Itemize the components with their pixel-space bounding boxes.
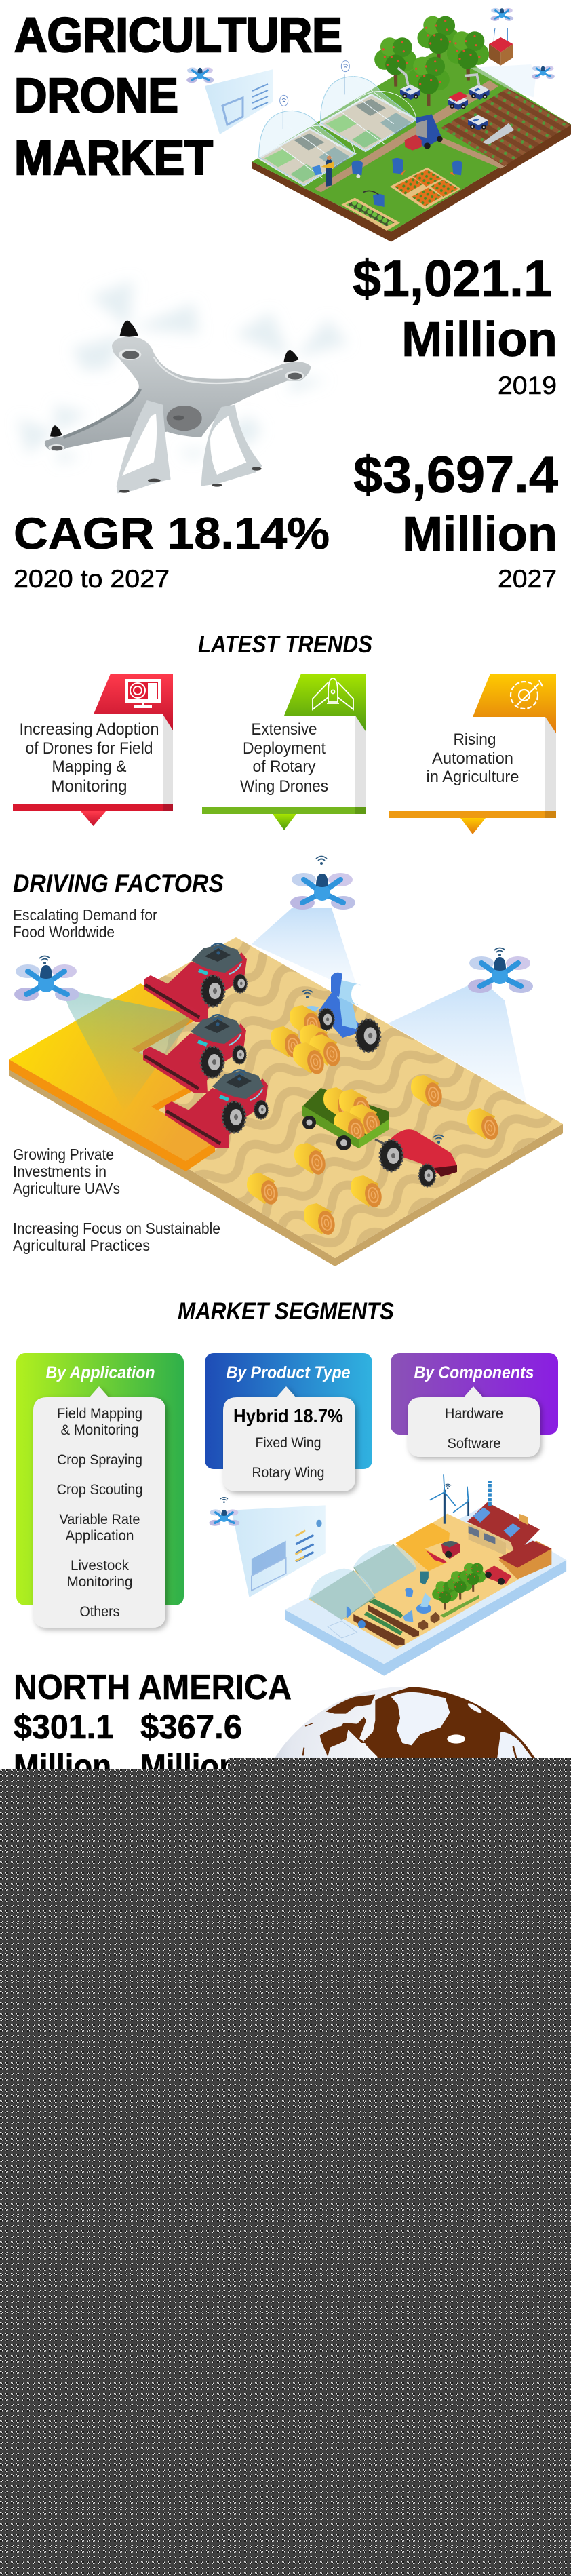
text: driver 1: Escalating Demand for bbox=[13, 906, 157, 924]
fruit trees bbox=[374, 16, 489, 106]
illustration: hologram panel with drone bbox=[209, 1498, 326, 1597]
stat: 2027 market size bbox=[353, 446, 558, 593]
panel: by product type: Rotary Wing bbox=[252, 1465, 324, 1481]
heading: driving factors: DRIVING FACTORS bbox=[13, 870, 224, 897]
panel: by application: Livestock bbox=[71, 1558, 129, 1574]
panel: by components: Hardware bbox=[445, 1406, 503, 1422]
stat: 2027 market size: $3,697.4 bbox=[353, 446, 558, 504]
icon: monitor with radar bbox=[125, 680, 161, 707]
region: north america: Million bbox=[140, 1747, 238, 1785]
panel: trend 3: Automation bbox=[432, 749, 513, 768]
panel: trend 2 bbox=[202, 674, 366, 830]
title: MARKET bbox=[14, 132, 213, 185]
icon: fixed wing drone bbox=[313, 678, 353, 709]
light beams bbox=[252, 908, 526, 1102]
panel: trend 1: Monitoring bbox=[52, 777, 127, 796]
region: north america: Million bbox=[14, 1747, 111, 1785]
panel: by components: Software bbox=[448, 1436, 500, 1451]
crop beds bbox=[341, 168, 461, 231]
panel: by product type: By Product Type bbox=[227, 1363, 351, 1382]
farmer bbox=[312, 155, 334, 187]
panel: by application: Field Mapping bbox=[57, 1406, 142, 1422]
heading: latest trends: LATEST TRENDS bbox=[198, 630, 372, 658]
text: driver 3: Increasing Focus on Sustainable bbox=[13, 1219, 220, 1237]
panel: by application: & Monitoring bbox=[61, 1422, 138, 1438]
stat: CAGR bbox=[14, 508, 330, 593]
stat: 2019 market size: $1,021.1 bbox=[353, 250, 552, 308]
panel: trend 2: Wing Drones bbox=[240, 777, 328, 796]
title: AGRICULTURE bbox=[14, 9, 342, 62]
text: driver 2 bbox=[13, 1146, 120, 1197]
title: DRONE bbox=[14, 69, 178, 123]
panel: by application bbox=[16, 1353, 184, 1628]
panel: trend 3: Rising bbox=[453, 730, 496, 749]
panel: trend 1: Increasing Adoption bbox=[19, 720, 159, 739]
illustration: smart farm bbox=[252, 8, 571, 242]
region: north america: NORTH AMERICA bbox=[14, 1668, 292, 1707]
red tractor bbox=[380, 1129, 457, 1187]
dark patterned overlay bbox=[0, 1758, 571, 2576]
panel: trend 2: Deployment bbox=[243, 739, 326, 758]
hologram panel with drone bbox=[186, 68, 273, 134]
text: driver 3 bbox=[13, 1219, 220, 1254]
blue robot bbox=[298, 973, 380, 1052]
text: driver 2: Agriculture UAVs bbox=[13, 1179, 120, 1197]
text: driver 3: Agricultural Practices bbox=[13, 1236, 150, 1254]
stat: CAGR: 2020 to 2027 bbox=[14, 565, 170, 593]
heading: market segments: MARKET SEGMENTS bbox=[178, 1298, 394, 1325]
panel: by components: By Components bbox=[414, 1363, 534, 1382]
stat: 2019 market size: 2019 bbox=[498, 372, 557, 399]
panel: by components bbox=[391, 1353, 558, 1457]
panel: trend 1: of Drones for Field bbox=[26, 739, 153, 758]
panel: trend 3: in Agriculture bbox=[426, 768, 519, 786]
farmhouse bbox=[467, 1502, 551, 1579]
panel: by application: Others bbox=[80, 1604, 119, 1620]
crop patch and harvester bbox=[395, 1523, 471, 1572]
panel: by product type: Fixed Wing bbox=[255, 1435, 321, 1451]
text: driver 2: Growing Private bbox=[13, 1146, 114, 1163]
text: driver 1 bbox=[13, 906, 157, 941]
panel: by application: Monitoring bbox=[66, 1574, 133, 1590]
drone image bbox=[18, 280, 348, 493]
region: north america bbox=[14, 1668, 292, 1785]
illustration: globe bbox=[275, 1687, 535, 1758]
panel: trend 1 bbox=[13, 674, 173, 826]
panel: by application: Crop Scouting bbox=[57, 1482, 142, 1498]
panel: trend 2: Extensive bbox=[251, 720, 317, 739]
robots bbox=[351, 68, 514, 207]
panel: trend 1: Mapping & bbox=[52, 758, 126, 776]
hay bales bbox=[247, 1005, 500, 1236]
stat: 2027 market size: 2027 bbox=[498, 565, 557, 593]
orchard, robots and crop beds bbox=[347, 1563, 512, 1646]
panel: trend 2: of Rotary bbox=[252, 758, 316, 776]
panel: by product type bbox=[205, 1353, 372, 1491]
icon: gear and wrench bbox=[511, 680, 543, 709]
panel: by product type: Hybrid 18.7% bbox=[233, 1405, 343, 1426]
panel: by application: Crop Spraying bbox=[57, 1452, 142, 1468]
panel: by application: Variable Rate bbox=[60, 1512, 140, 1527]
stat: CAGR: CAGR 18.14% bbox=[14, 508, 330, 558]
title bbox=[14, 9, 342, 185]
harvesters bbox=[143, 943, 268, 1148]
panel: by application: Application bbox=[65, 1528, 134, 1544]
illustration: smart farm on phone bbox=[285, 1474, 566, 1676]
wind turbines and mast bbox=[430, 1474, 490, 1524]
panel: trend 3 bbox=[389, 674, 556, 834]
survey drones bbox=[14, 856, 533, 1001]
stat: 2019 market size bbox=[353, 250, 557, 399]
drone with crate bbox=[489, 8, 513, 66]
text: driver 1: Food Worldwide bbox=[13, 923, 115, 941]
region: north america: $367.6 bbox=[140, 1708, 242, 1746]
scanning drone bbox=[470, 64, 555, 97]
region: north america: $301.1 bbox=[14, 1708, 114, 1746]
stat: 2027 market size: Million bbox=[402, 507, 557, 562]
cart with bales bbox=[302, 1087, 390, 1150]
greenhouses bbox=[309, 1544, 417, 1620]
text: driver 2: Investments in bbox=[13, 1163, 106, 1180]
stat: 2019 market size: Million bbox=[401, 313, 557, 367]
illustration: harvesting field bbox=[9, 856, 563, 1266]
panel: by application: By Application bbox=[46, 1363, 155, 1382]
